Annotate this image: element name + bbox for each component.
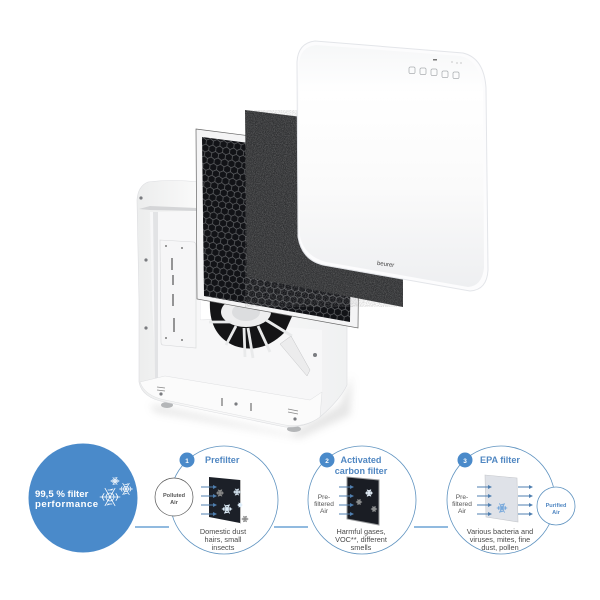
step description: smells xyxy=(351,543,372,552)
EPA filter illustration xyxy=(477,475,533,522)
front white panel xyxy=(297,41,488,291)
step description: Harmful gases, xyxy=(336,527,386,536)
purified air circle xyxy=(537,487,575,525)
polluted air circle xyxy=(155,478,193,516)
purified air circle: Purified xyxy=(546,503,567,509)
polluted air circle: Polluted xyxy=(163,493,186,499)
pre-filtered air label: Air xyxy=(320,508,329,515)
step description: hairs, small xyxy=(205,535,242,544)
air purifier exploded product view xyxy=(137,41,488,438)
step heading: EPA filter xyxy=(480,455,520,465)
step number: 1 xyxy=(185,458,189,465)
purifier base housing xyxy=(137,180,347,427)
step heading: carbon filter xyxy=(335,466,388,476)
brand logo: beurer xyxy=(377,261,395,269)
floor shadow xyxy=(150,375,352,438)
step heading: Activated xyxy=(341,455,381,465)
fan bracket arm xyxy=(280,336,310,376)
carbon filter frame with honeycomb xyxy=(196,129,360,328)
screw holes xyxy=(139,196,317,421)
step heading: Prefilter xyxy=(205,455,240,465)
inner recess xyxy=(150,212,322,400)
step 1: prefilter xyxy=(155,446,278,554)
side bracket plate xyxy=(160,240,196,348)
connector lines xyxy=(135,526,448,528)
badge text: performance xyxy=(35,499,99,510)
step 2: activated carbon filter xyxy=(308,446,416,554)
purifier feet xyxy=(161,402,301,432)
pre-filtered air label: Pre- xyxy=(318,494,330,501)
badge snowflakes xyxy=(100,477,132,506)
step description: viruses, mites, fine xyxy=(470,535,530,544)
fan xyxy=(209,297,294,358)
step number: 3 xyxy=(463,458,467,465)
pre-filtered air label: Air xyxy=(458,508,467,515)
foam prefilter sheet xyxy=(245,110,403,307)
control panel icons xyxy=(409,67,459,78)
step description: Domestic dust xyxy=(200,527,246,536)
step number: 2 xyxy=(325,458,329,465)
pre-filtered air label: filtered xyxy=(314,501,334,508)
step description: Various bacteria and xyxy=(467,527,533,536)
prefilter illustration xyxy=(201,477,248,524)
step description: dust, pollen xyxy=(481,543,519,552)
purified air circle: Air xyxy=(552,510,561,516)
polluted air circle: Air xyxy=(170,500,179,506)
pre-filtered air label: filtered xyxy=(452,501,472,508)
step description: VOC**, different xyxy=(335,535,387,544)
step 3: EPA filter xyxy=(447,446,575,554)
status indicators xyxy=(433,59,462,64)
badge text: 99,5 % filter xyxy=(35,489,89,500)
step description: insects xyxy=(212,543,235,552)
performance badge xyxy=(28,444,138,552)
pre-filtered air label: Pre- xyxy=(456,494,468,501)
carbon filter illustration xyxy=(339,477,379,525)
